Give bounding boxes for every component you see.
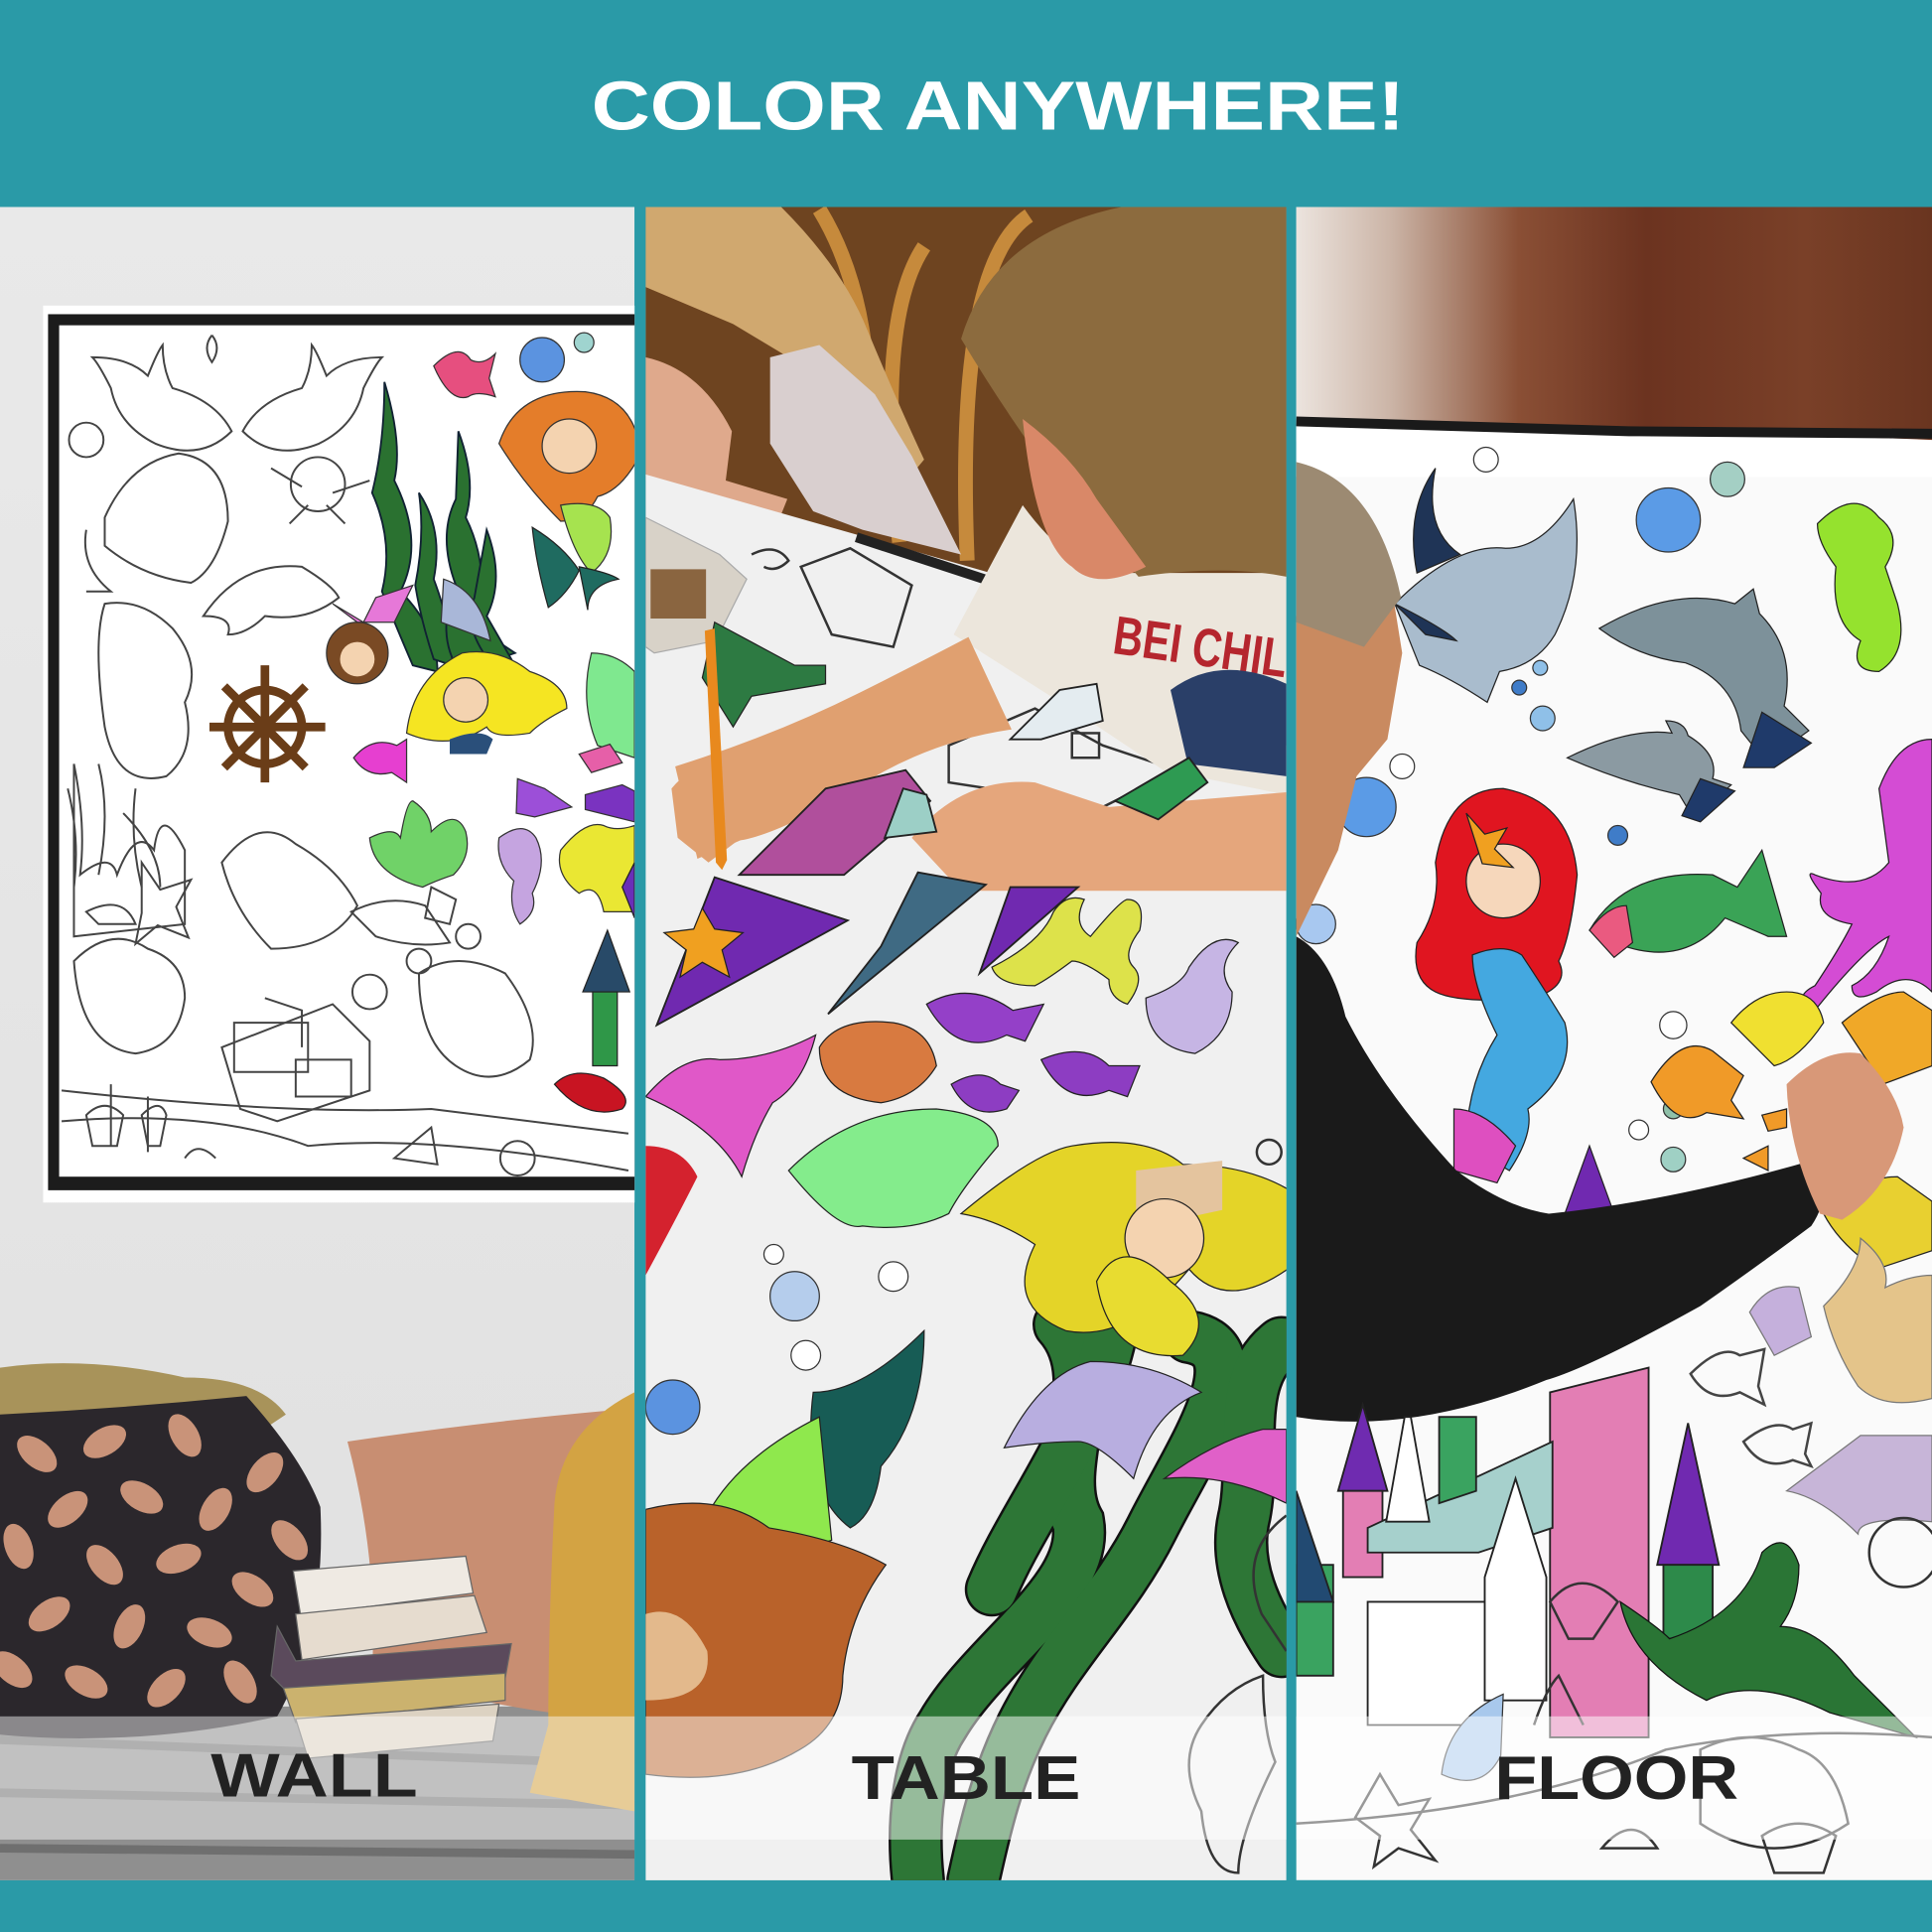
orange and yellow fish [1651,992,1932,1269]
poster edge [1297,421,1932,477]
castle [1297,1368,1719,1737]
bunny tail mermaid [327,586,413,684]
chairs [819,209,1029,561]
shirt print: BEI CHIL [1110,605,1292,689]
castle parts [656,684,1207,1026]
red hair [645,1146,697,1276]
man hair [1297,462,1401,647]
girl face and arm [645,357,787,530]
blue bubbles [1297,448,1744,1172]
pink octopus [1803,740,1932,1011]
green leg [696,1417,832,1565]
label band: floor [1297,1717,1932,1840]
teal tail [811,1330,924,1528]
title: COLOR ANYWHERE! [592,67,1405,144]
pale seahorse [1146,939,1238,1053]
green fish [1589,850,1787,957]
yellow coral [992,897,1142,1004]
pouf [530,1392,634,1811]
line art fish [1691,1349,1811,1466]
pencil [705,628,727,870]
table poster [645,475,1287,1880]
basket [0,1363,321,1738]
green seahorse [1818,503,1901,671]
line art whales [69,336,382,457]
label: wall: WALL [210,1741,418,1810]
line art table [752,548,1176,807]
orange mermaid hair [645,1503,886,1777]
red mermaid [1416,788,1578,1182]
boy shirt [954,505,1287,794]
hand [1787,1052,1903,1220]
pink tail [645,1035,816,1176]
poster edge [857,537,992,582]
man sleeve [1297,936,1825,1422]
lace shirt [770,345,961,554]
shirt print [1114,616,1287,776]
label: floor: FLOOR [1494,1744,1738,1813]
panel: wall [0,207,652,1880]
line art mermaids and creatures [62,454,628,1175]
stingray [1395,469,1577,702]
panel: floor [1297,207,1932,1880]
blue shell [1442,1694,1503,1780]
yellow mermaid upside down [961,1143,1288,1356]
line art octopus [1189,1140,1287,1872]
label band: wall [0,1717,634,1840]
seaweed [372,382,515,671]
crayon box [645,517,747,653]
colored fish [926,993,1140,1112]
poster frame [43,306,652,1202]
castle tower [554,863,634,1112]
pale coral [1749,1238,1932,1534]
orange mermaid [499,391,640,610]
line art bottom [1297,1518,1932,1872]
pink tail right [1165,1430,1287,1503]
label band: table [645,1717,1287,1840]
cushion [347,1411,619,1719]
wood background [645,207,1287,577]
ship wheel [209,665,326,782]
boy arms [671,637,1287,891]
green seaweed strip [702,622,826,727]
panel: table [645,207,1292,1880]
green seaweed right [1620,1543,1916,1737]
bubbles [645,1244,908,1435]
dolphins [1568,589,1811,822]
books [271,1556,511,1758]
floor [0,1707,634,1880]
green leaf [788,1109,998,1227]
yellow mermaid [407,579,567,755]
fish, sponge and plants [353,333,634,924]
label: table: TABLE [852,1744,1080,1813]
man face [1297,592,1402,936]
orange starfish [664,908,743,977]
blonde girl hair [645,207,961,554]
boy face [1023,419,1146,579]
orange sponge [819,1022,936,1103]
wood floor [1297,207,1932,441]
purple spire [1565,1146,1614,1213]
boy hair [961,207,1287,577]
dark green kelp [915,1324,1282,1880]
periwinkle tail [1004,1361,1201,1478]
